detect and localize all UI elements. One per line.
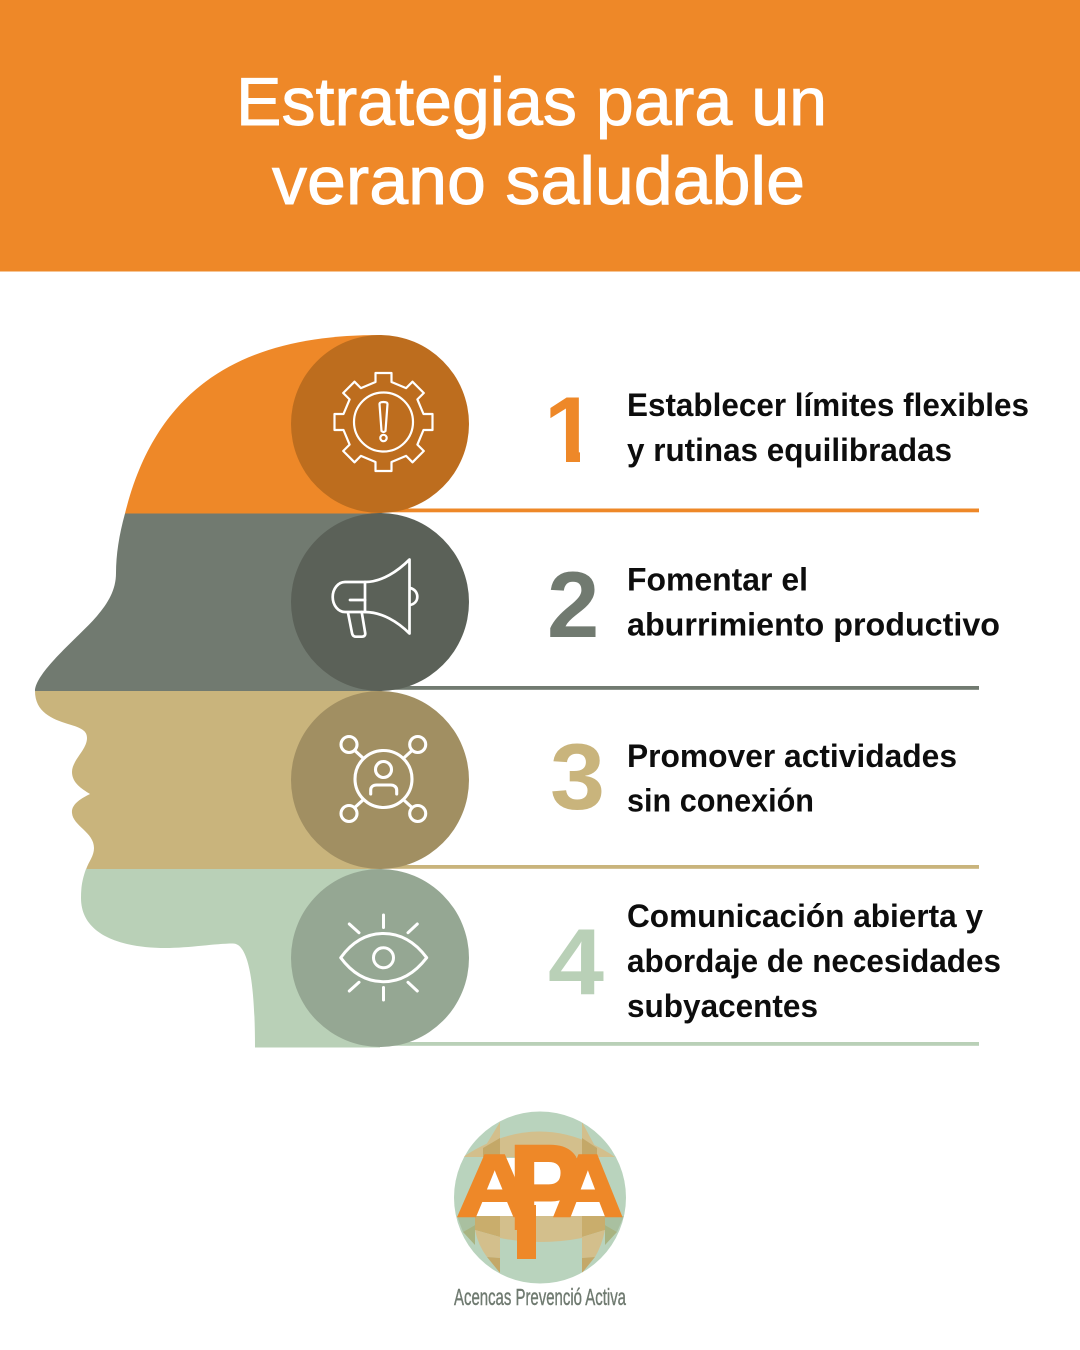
logo letters: P (509, 1122, 582, 1253)
head band: grey forehead (35, 514, 380, 692)
item 1 (550, 392, 1028, 468)
head band: orange crown (125, 335, 380, 514)
icon: person network (341, 736, 426, 822)
text: item 4 (627, 898, 1001, 1024)
header banner with title (0, 0, 1080, 272)
text: item 1: y rutinas equilibradas (627, 432, 952, 468)
logo letters: A (553, 1138, 623, 1235)
head band: green neck (81, 869, 380, 1048)
text: item 2: aburrimiento productivo (627, 606, 1000, 642)
item 4 (548, 898, 1001, 1024)
number 2: 2 (547, 552, 599, 657)
text: item 1: Establecer límites flexibles (627, 387, 1029, 423)
step 1 circle with gear icon (291, 335, 469, 513)
head silhouette (35, 335, 380, 1048)
text: item 3: Promover actividades (627, 738, 957, 774)
step 3 circle with network icon (291, 691, 469, 869)
step 4 circle with eye icon (291, 869, 469, 1047)
head band: tan face (35, 691, 380, 870)
title (236, 64, 827, 219)
text: item 2 (627, 562, 1000, 642)
icon: gear with exclamation mark (334, 373, 432, 471)
logo letters (457, 1122, 623, 1253)
text: item 2: Fomentar el (627, 562, 808, 598)
icon: eye (341, 915, 427, 1000)
item 3 (550, 724, 957, 829)
item 2 (547, 552, 1000, 657)
number 1: 1 (544, 377, 596, 482)
logo caption: Acencas Prevenció Activa (454, 1284, 626, 1310)
text: item 4: abordaje de necesidades (627, 943, 1001, 979)
icon: megaphone (333, 560, 417, 637)
text: item 1 (627, 387, 1029, 468)
divider lines (380, 508, 979, 1046)
number 4: 4 (548, 909, 604, 1014)
step 2 circle with megaphone icon (291, 513, 469, 691)
text: item 3 (627, 738, 957, 818)
text: item 4: subyacentes (627, 988, 818, 1024)
title: verano saludable (272, 143, 805, 219)
logo: APA (454, 1112, 626, 1310)
text: item 3: sin conexión (627, 782, 814, 818)
text: item 4: Comunicación abierta y (627, 898, 983, 934)
logo letters: A (457, 1138, 532, 1235)
number 3: 3 (550, 724, 605, 829)
title: Estrategias para un (236, 64, 827, 140)
